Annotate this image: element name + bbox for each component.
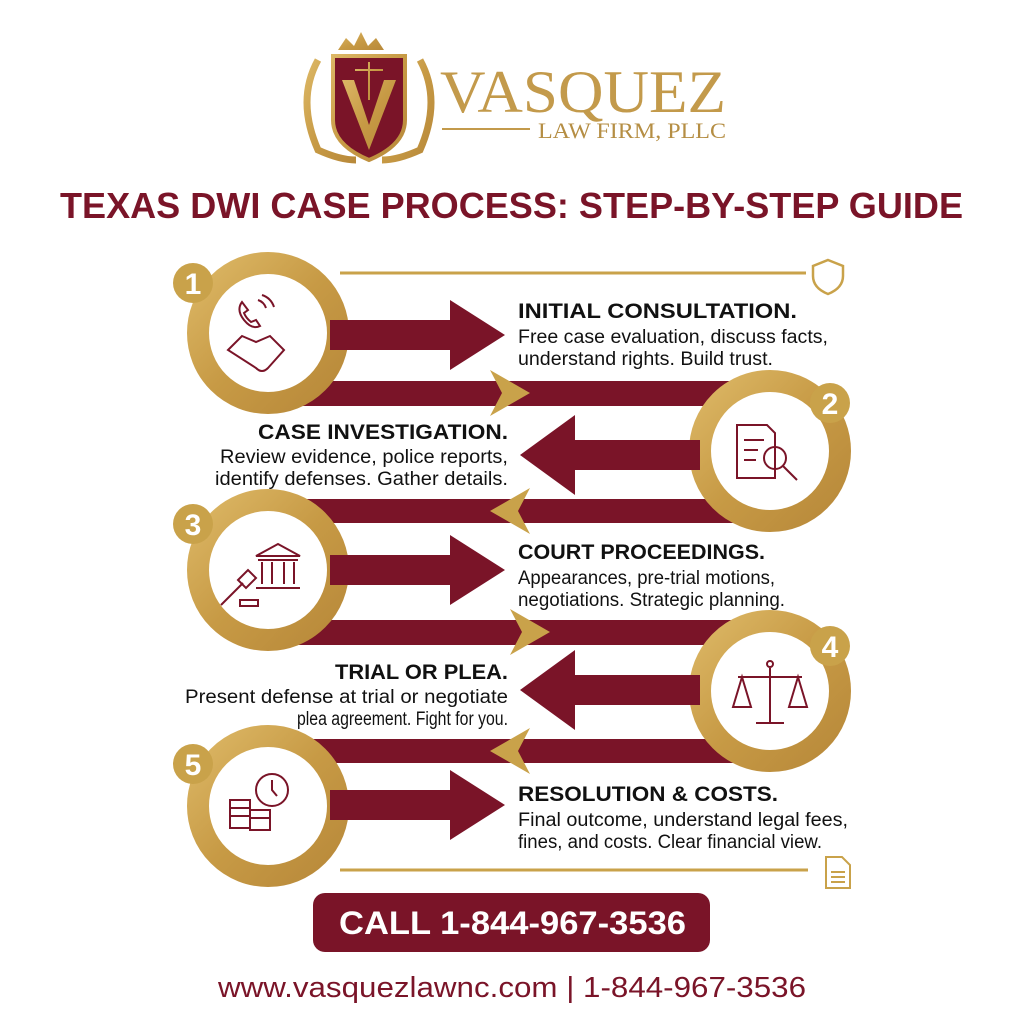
arrow left <box>520 415 700 495</box>
icon: phone handshake <box>228 295 284 371</box>
step 4: TRIAL OR PLEA. <box>335 661 508 684</box>
icon: scales <box>733 661 807 723</box>
icon: coins clock <box>230 774 288 830</box>
step 1: understand rights. Build trust. <box>518 349 773 370</box>
logo <box>307 32 726 160</box>
logo: LAW FIRM, PLLC <box>538 118 726 143</box>
step 2: identify defenses. Gather details. <box>215 469 508 490</box>
step 1: Free case evaluation, discuss facts, <box>518 327 828 348</box>
step 5: Final outcome, understand legal fees, <box>518 810 848 831</box>
call button: CALL 1-844-967-3536 <box>339 905 686 941</box>
icon: document magnifier <box>737 425 797 480</box>
title: TEXAS DWI CASE PROCESS: STEP-BY-STEP GUIDE <box>60 185 963 226</box>
bottom divider with document icon <box>340 857 850 888</box>
firm name: VASQUEZ <box>440 59 726 125</box>
step 4: plea agreement. Fight for you. <box>297 709 508 730</box>
step 2 <box>215 381 850 521</box>
step 2: 2 <box>822 388 838 421</box>
step 2: CASE INVESTIGATION. <box>258 421 508 444</box>
footer url: www.vasquezlawnc.com | 1-844-967-3536 <box>217 972 806 1004</box>
step 4: Present defense at trial or negotiate <box>185 687 508 708</box>
step 5: 5 <box>185 749 201 782</box>
step 1: INITIAL CONSULTATION. <box>518 300 797 323</box>
step 5: RESOLUTION & COSTS. <box>518 783 778 806</box>
step 5 <box>173 736 848 876</box>
step 3: 3 <box>185 509 201 542</box>
step 4: 4 <box>822 631 839 664</box>
arrow right <box>330 300 505 370</box>
connector bands <box>260 370 780 774</box>
step 3 <box>173 500 785 640</box>
step 4 <box>185 621 850 761</box>
step 2: Review evidence, police reports, <box>220 447 508 468</box>
step 3: Appearances, pre-trial motions, <box>518 568 775 589</box>
icon: laurel crest <box>307 32 431 160</box>
step 3: COURT PROCEEDINGS. <box>518 541 765 564</box>
step 5: fines, and costs. Clear financial view. <box>518 832 822 853</box>
step 1: 1 <box>185 268 201 301</box>
step 3: negotiations. Strategic planning. <box>518 590 785 611</box>
icon: courthouse gavel <box>221 544 300 606</box>
call button <box>313 893 710 952</box>
step 1 <box>173 263 828 403</box>
top divider with shield <box>340 260 843 294</box>
